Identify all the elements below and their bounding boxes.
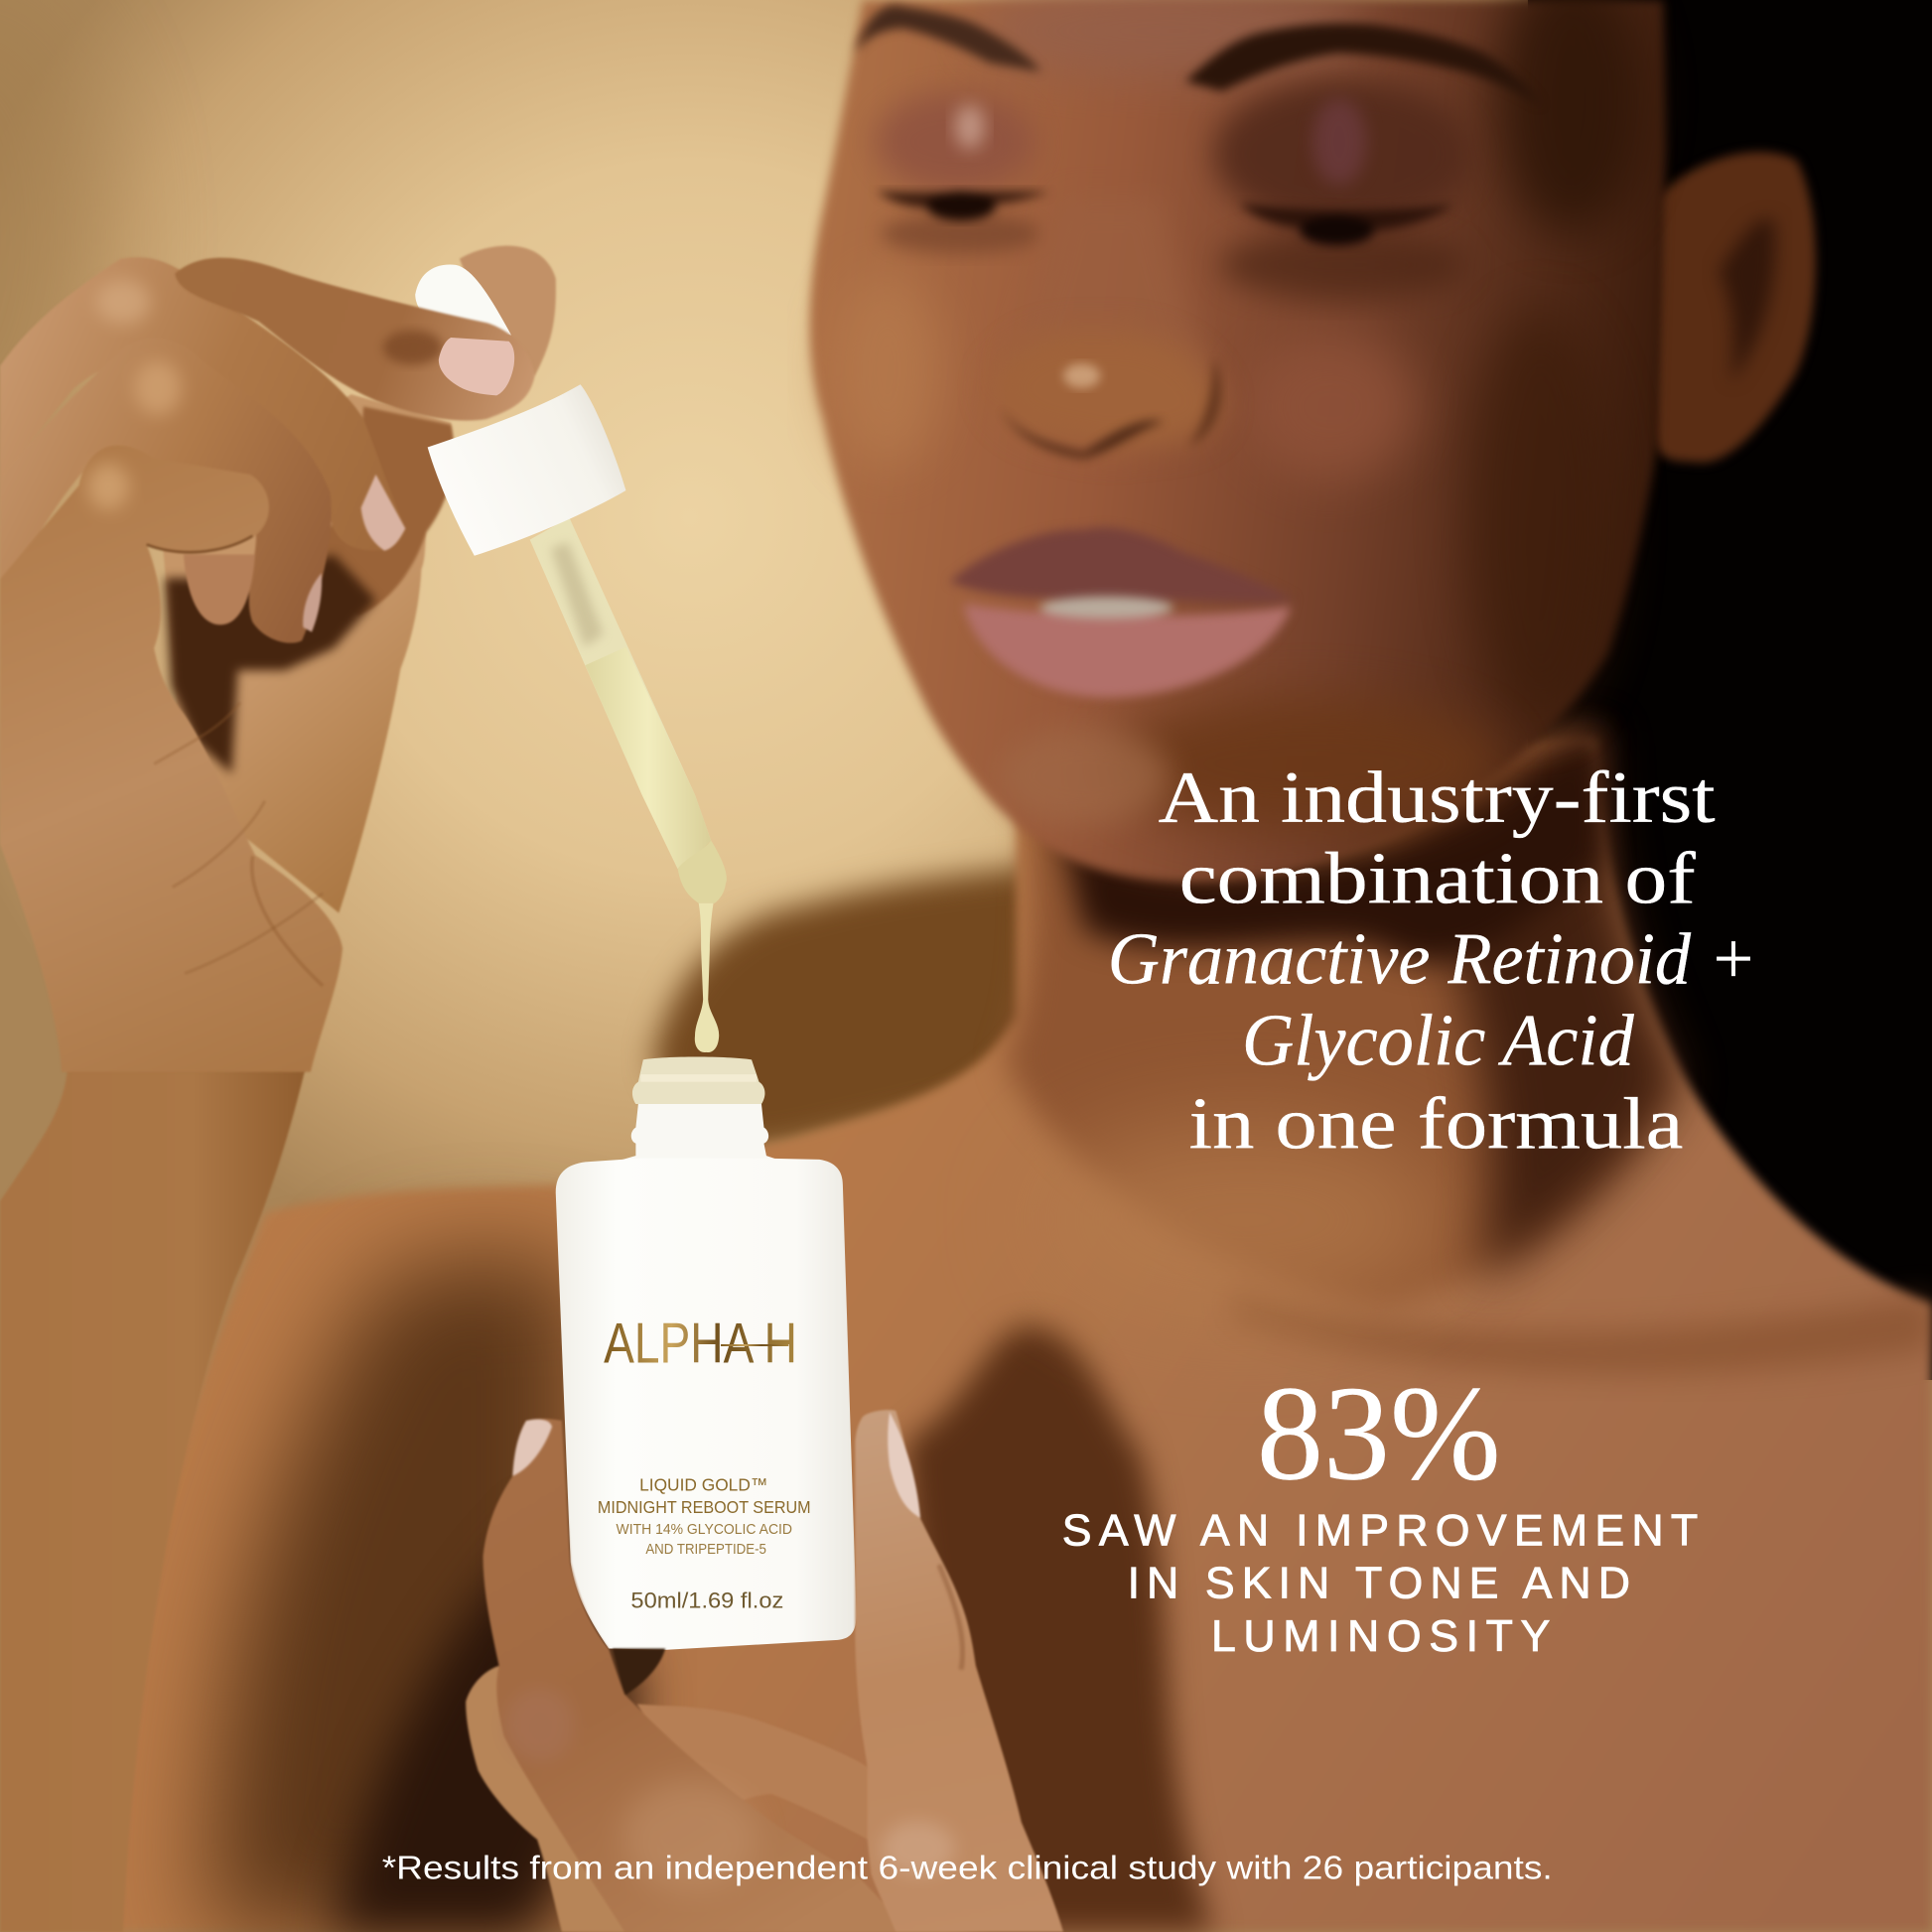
background: wall shadow behind neck: [653, 863, 1059, 1152]
statistic caption: [1062, 1506, 1698, 1661]
icon: dropper pipette: [175, 246, 727, 903]
lash line right: [1240, 204, 1453, 231]
headline line 5: in one formula: [1189, 1084, 1683, 1166]
inner ear: [1719, 218, 1775, 382]
nostril shade: [1001, 409, 1165, 459]
middle finger behind: [637, 1704, 873, 1842]
thumb sheen: [622, 1780, 758, 1891]
left cheek highlight: [832, 271, 942, 469]
jaw bottom tone: [1109, 696, 1503, 832]
index nail: [888, 1412, 920, 1518]
neck highlight band: [640, 1074, 757, 1082]
eye left: [878, 191, 1049, 220]
figure: shadow under the jaw: [1059, 727, 1601, 963]
index finger dark patch: [383, 331, 443, 364]
right cheek shade: [1466, 308, 1614, 727]
finger joint highlight: [881, 1821, 955, 1875]
brand name: ALPHA H: [604, 1312, 797, 1376]
iris left: [926, 191, 996, 220]
product line: LIQUID GOLD™: [639, 1475, 767, 1495]
icon: serum bottle: [556, 1057, 857, 1650]
iris right: [1300, 215, 1374, 245]
bottle body: [556, 1159, 857, 1650]
footnote: *Results from an independent 6-week clinical study with 26 participants.: [382, 1851, 1553, 1887]
nose bridge: [1004, 198, 1213, 394]
thumb: [483, 1419, 909, 1932]
liquid inside tube: [586, 647, 711, 869]
headline: [1108, 758, 1757, 1166]
figure: face: [810, 0, 1666, 882]
lips: [950, 527, 1295, 697]
eyebrow left: [855, 5, 1041, 71]
product name: MIDNIGHT REBOOT SERUM: [598, 1497, 811, 1517]
glass tube: [530, 517, 711, 869]
thumb behind bulb: [460, 246, 556, 376]
headline line 2: combination of: [1179, 839, 1696, 920]
background: darker top-left corner: [0, 0, 111, 481]
knuckle highlight 2: [134, 361, 181, 415]
hand back lobe: [0, 446, 343, 1072]
finger fold line: [147, 536, 252, 552]
teeth: [1039, 597, 1173, 619]
chin tone: [998, 727, 1171, 826]
figure: bottle shadow on chest: [905, 1324, 1213, 1932]
statistic: 83%: 83%: [1257, 1357, 1501, 1508]
figure: dark area under the bottle: [333, 1516, 640, 1932]
caption line 2: IN SKIN TONE AND: [1128, 1560, 1630, 1608]
dark gap under bottle: [613, 1649, 665, 1696]
caption line 3: LUMINOSITY: [1211, 1612, 1550, 1661]
figure: neck tone: [1004, 727, 1670, 1307]
ingredient line 1: WITH 14% GLYCOLIC ACID: [617, 1522, 792, 1538]
thumbnail: [512, 1419, 552, 1476]
eyelid left: [875, 92, 1035, 191]
volume: 50ml/1.69 fl.oz: [630, 1588, 783, 1613]
figure: neck highlight: [1035, 1121, 1453, 1318]
knuckle highlight 1: [87, 464, 129, 510]
lower lip: [964, 604, 1292, 697]
figure: shaded right side of neck: [1417, 727, 1682, 1282]
hand crease on wrist: [252, 857, 323, 986]
eye right: [1240, 204, 1453, 245]
finger fold shade: [939, 1565, 963, 1670]
icon: upper hand holding dropper: [0, 257, 454, 1072]
ring finger: [0, 338, 332, 643]
mid cheek rose: [1244, 333, 1417, 481]
under-eye shade left: [881, 214, 1041, 254]
headline line 1: An industry-first: [1159, 758, 1716, 839]
headline line 3: Granactive Retinoid +: [1108, 918, 1757, 1000]
milky residue in tube: [551, 542, 604, 647]
right temple shade: [1497, 0, 1645, 234]
figure: collarbone shading: [1232, 1288, 1932, 1375]
icon: lower hand holding bottle: [466, 1410, 1063, 1932]
middle fingernail: [361, 475, 405, 551]
nose highlight: [1063, 363, 1100, 388]
knuckle tone: [505, 1688, 574, 1762]
rubber bulb: [415, 264, 511, 336]
eyelid shine left: [955, 104, 985, 149]
figure: ear: [1653, 152, 1816, 463]
eyelid shine right: [1312, 98, 1366, 185]
product label: [598, 1475, 811, 1613]
nose right wing shade: [1189, 357, 1221, 446]
translucent neck thread: [632, 1057, 764, 1104]
index finger over bulb: [175, 258, 535, 421]
dropper tip: [678, 840, 727, 903]
background: black backdrop on the right: [1528, 0, 1932, 1380]
palm upper shade: [308, 407, 454, 617]
caption line 1: SAW AN IMPROVEMENT: [1062, 1506, 1698, 1555]
ring finger behind: [466, 1666, 665, 1932]
forehead tone: [973, 0, 1368, 80]
palm base: [160, 394, 454, 913]
figure: chest and shoulders: [98, 740, 1932, 1932]
figure: left forearm: [0, 1047, 311, 1932]
ring fingernail: [303, 573, 322, 632]
index finger: [855, 1410, 1063, 1932]
upper lip: [950, 527, 1295, 603]
nose: [990, 332, 1222, 452]
ingredient line 2: AND TRIPEPTIDE-5: [645, 1542, 766, 1558]
little finger tip: [184, 554, 255, 624]
white dropper collar: [428, 384, 625, 556]
icon: serum drip: [695, 903, 719, 1052]
knuckle highlight 3: [96, 280, 150, 324]
logo dash: [721, 1344, 788, 1346]
figure: shaded left shoulder: [209, 1257, 579, 1932]
under-eye shade right: [1220, 230, 1466, 300]
headline line 4: Glycolic Acid: [1242, 1000, 1634, 1081]
wrist creases: [154, 702, 323, 973]
eyebrow right: [1185, 23, 1542, 106]
white neck: [610, 1104, 788, 1164]
eye socket right: [1213, 80, 1472, 228]
lash line left: [878, 191, 1049, 208]
middle finger: [0, 257, 405, 551]
palm shadow: [165, 554, 376, 773]
index fingernail: [439, 338, 514, 395]
